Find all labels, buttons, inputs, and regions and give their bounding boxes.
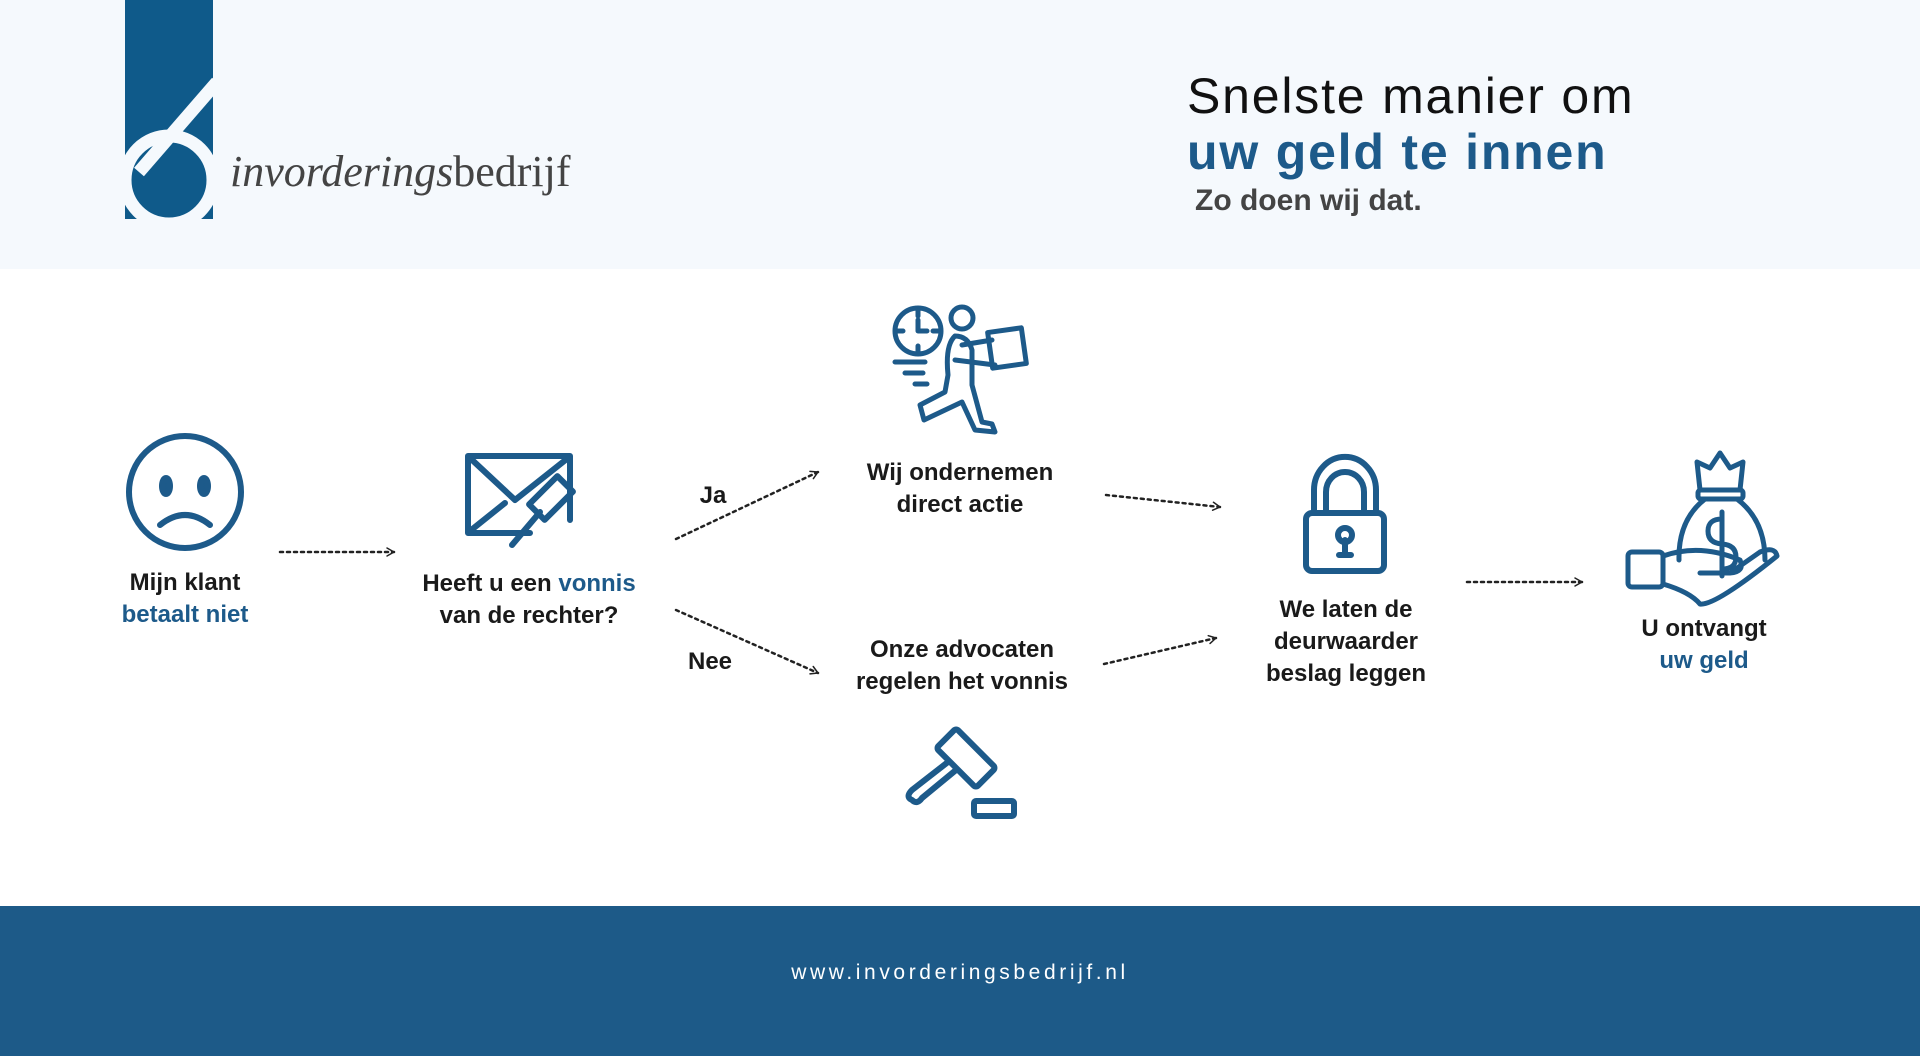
label: advocaten: Onze advocaten: [870, 636, 1054, 663]
subtitle: Zo doen wij dat.: [1195, 184, 1422, 217]
label: sad: Mijn klant: [130, 569, 240, 596]
header band: [0, 0, 1920, 269]
label: sad: [122, 569, 248, 628]
flow graphics: [126, 304, 1780, 819]
logo: invorderingsbedrijf: [230, 147, 571, 196]
title: [1187, 68, 1634, 180]
footer url: www.invorderingsbedrijf.nl: [791, 961, 1129, 984]
icon: lock: [1306, 457, 1384, 571]
label: geld: uw geld: [1659, 647, 1749, 674]
label: vonnis: [422, 570, 636, 629]
label: actie: Wij ondernemen: [867, 459, 1053, 486]
label: vonnis: Heeft u een vonnis: [422, 570, 636, 597]
label: Nee: Nee: [688, 648, 732, 675]
label: vonnis: van de rechter?: [440, 602, 618, 629]
title: uw geld te innen: [1187, 124, 1607, 180]
arrows branch: [676, 472, 1582, 673]
label: sad: betaalt niet: [122, 601, 248, 628]
icon: envelope with gavel: [468, 456, 573, 545]
label: deurwaarder: [1266, 596, 1426, 687]
label: deurwaarder: deurwaarder: [1274, 628, 1418, 655]
footer: [0, 906, 1920, 1056]
icon: money bag in hand: [1628, 453, 1777, 604]
arrow 1: [280, 551, 394, 553]
label: deurwaarder: We laten de: [1280, 596, 1412, 623]
label: actie: direct actie: [897, 491, 1023, 518]
label: deurwaarder: beslag leggen: [1266, 660, 1426, 687]
label: actie: [866, 459, 1053, 518]
label: advocaten: regelen het vonnis: [856, 668, 1068, 695]
label: geld: [1641, 615, 1767, 674]
icon: runner: [895, 307, 1026, 432]
label: Ja: Ja: [700, 482, 726, 509]
logo: [125, 0, 571, 219]
icon: sad face: [129, 436, 241, 548]
icon: gavel: [908, 728, 1014, 816]
label: advocaten: [856, 636, 1068, 695]
label: geld: U ontvangt: [1641, 615, 1767, 642]
title: Snelste manier om: [1187, 68, 1634, 124]
